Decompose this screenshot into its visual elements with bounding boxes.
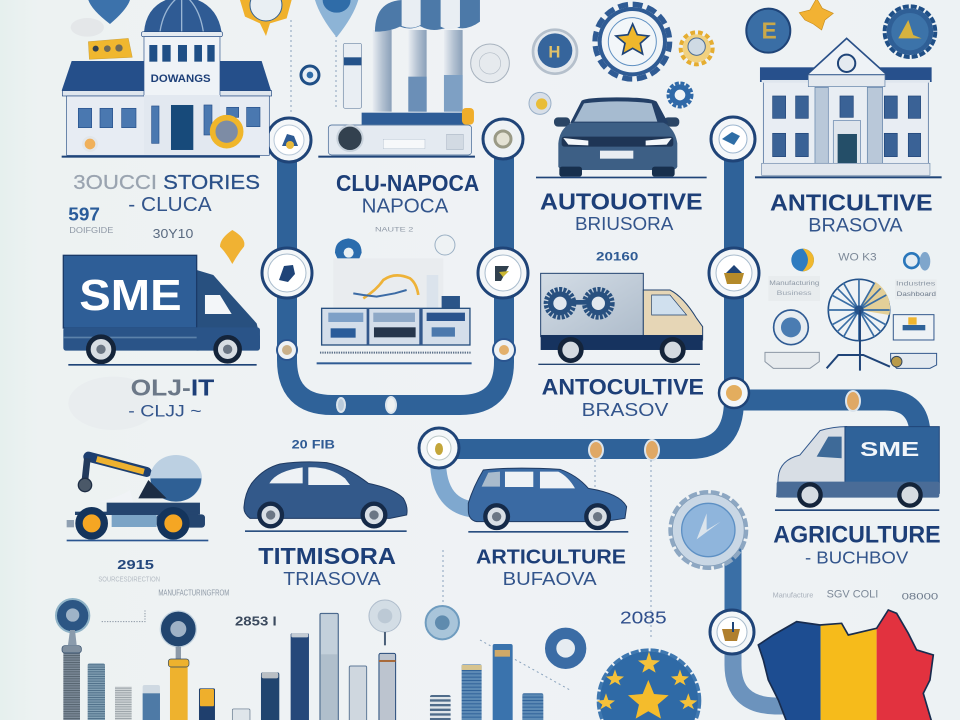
- faint stat labels: 08000: [902, 591, 938, 601]
- icon: yellow star badge: [799, 0, 833, 30]
- subtitle: Bufaova: BUFAOVA: [503, 568, 597, 589]
- car front: [536, 97, 707, 178]
- marker circle 3: [369, 600, 401, 645]
- pipe markers: [337, 391, 860, 460]
- title: Timisora: TITMISORA: [258, 543, 396, 569]
- icon: blue gear: [668, 83, 692, 107]
- timeline nodes: [262, 117, 860, 654]
- year label: 30Y10: [153, 227, 193, 241]
- building: [62, 0, 272, 158]
- panel: lower vehicles: [56, 455, 482, 720]
- icon: blue and yellow ball: [791, 249, 814, 271]
- node: top left: [267, 118, 311, 162]
- timeline pipe: light bend: [733, 640, 800, 706]
- title: Anticultive: ANTICULTIVE: [770, 190, 933, 216]
- icon: yellow gear: [240, 0, 292, 36]
- node: lower left: [419, 428, 459, 468]
- node: top centre: [483, 119, 523, 159]
- caption block right: Dashboard: [897, 291, 936, 298]
- icon: wind wheel: [827, 279, 890, 371]
- SME truck: [63, 255, 260, 366]
- panel: SME truck section: [63, 230, 472, 480]
- title: Antocultive: ANTOCULTIVE: [542, 374, 704, 399]
- year label: 2085: [620, 607, 667, 627]
- caption block left: Business: [777, 290, 812, 297]
- icon: crane pivot: [78, 478, 92, 492]
- panel: lower right: [538, 249, 939, 511]
- icon: flame pin: [220, 230, 244, 264]
- faint blob: [68, 377, 158, 430]
- timeline pipe: lower connector: [445, 150, 734, 449]
- subtitle: Napoca: NAPOCA: [362, 196, 449, 218]
- node: middle left: [262, 248, 312, 298]
- faint smudge: [71, 18, 104, 37]
- title: Articulture: ARTICULTURE: [476, 545, 626, 568]
- node: lower right: [710, 610, 754, 654]
- faint stat labels: Manufacture: [773, 590, 813, 599]
- subtitle: Brasova: BRASOVA: [808, 216, 903, 237]
- subtitle: Brasov: BRASOV: [582, 399, 669, 420]
- marker circle 4: [426, 606, 459, 639]
- title: Cluj-Napoca: CLU-NAPOCA: [336, 170, 479, 196]
- classical building: [755, 38, 942, 178]
- node: junction: [719, 378, 749, 408]
- year label: 2853 I: [235, 615, 277, 629]
- title: Agriculture: AGRICULTURE: [773, 522, 941, 549]
- subtitle: TRIASOVA: [283, 568, 381, 589]
- caption block right: [895, 279, 937, 299]
- panel: control desk: [317, 258, 472, 364]
- panel: town hall: [62, 0, 480, 241]
- node: small left: [277, 340, 297, 360]
- year label: 2915: [117, 558, 154, 572]
- dotted guide lines: [291, 20, 651, 690]
- icon: yellow gear: [681, 32, 713, 64]
- factory: [318, 0, 480, 158]
- timeline pipe: branch to van: [734, 400, 920, 436]
- SME truck: SME: [79, 271, 182, 320]
- subtitle: Clj: - CLJJ ~: [128, 402, 202, 421]
- stat: 597: 597: [68, 204, 100, 225]
- small caption: NAUTE 2: [375, 227, 414, 234]
- year label: 20160: [596, 250, 639, 264]
- icon: faint badge: [435, 235, 455, 255]
- chart bars right: [493, 644, 543, 720]
- icon: laptop: [891, 315, 937, 368]
- title: Automotive: AUTOUOTIVE: [540, 188, 703, 214]
- crane arm: [85, 457, 147, 480]
- icon: blue outline ball: [904, 252, 930, 271]
- crane vehicle: [67, 455, 208, 541]
- subtitle: Cluca: - CLUCA: [128, 194, 212, 216]
- faint caption line 2: MANUFACTURINGFROM: [158, 589, 229, 598]
- side car: [244, 462, 407, 532]
- marker circle 1: [56, 599, 89, 645]
- icon: EU stars badge: [597, 650, 700, 720]
- icon: light gear: [670, 492, 746, 568]
- dotted leader: [102, 609, 145, 622]
- stat caption: DOIFGIDE: [69, 226, 113, 235]
- timeline pipe: left loop: [287, 150, 504, 405]
- node: small centre: [493, 339, 515, 361]
- node: top right: [711, 117, 755, 161]
- year label: 20 FIB: [292, 437, 335, 451]
- icon: blue pin: [335, 238, 362, 272]
- faint stat labels: SGV COLI: [827, 588, 878, 600]
- faint label: WO K3: [838, 252, 877, 264]
- gear truck: [538, 273, 703, 365]
- caption block left: [768, 276, 820, 301]
- node: middle centre: [478, 248, 528, 298]
- icon: blue gear badge: [885, 6, 935, 57]
- icon: small ring: [301, 66, 319, 84]
- icon: ring: [551, 633, 581, 663]
- icon: faint ring: [471, 44, 509, 83]
- timeline pipe: to Romania map: [724, 540, 742, 640]
- icon: top pin: [88, 0, 130, 24]
- SME van: [775, 427, 939, 511]
- caption block left: Manufacturing: [769, 280, 820, 287]
- faint stat labels: [773, 588, 938, 601]
- caption block right: Industries: [896, 281, 936, 288]
- timeline pipe: light curve to car: [438, 460, 478, 510]
- map: Romania flag: [757, 609, 934, 720]
- panel: bottom right: [476, 492, 941, 720]
- node: middle right: [709, 248, 759, 298]
- title: Doucci Stories: 3OUCCI STORIES: [73, 171, 260, 194]
- icon: silver badge: H: [548, 42, 560, 61]
- faint caption line 1: SOURCESDIRECTION: [98, 575, 160, 584]
- icon: light pin: [315, 0, 358, 37]
- icon: small gold badge: [529, 92, 551, 114]
- subtitle: Buchbov: - BUCHBOV: [805, 547, 908, 567]
- SME van: SME: [860, 439, 919, 461]
- icon: globe screen: [765, 310, 819, 368]
- icon: blue coin: E: [762, 18, 777, 44]
- panel: automotive and agriculture top: [471, 0, 942, 237]
- bars: [62, 613, 482, 720]
- icon: yellow sign: [88, 38, 132, 59]
- bar chart: [56, 599, 482, 720]
- icon: blue coin: [746, 9, 790, 53]
- title: Olj-IT: OLJ-IT: [131, 375, 214, 401]
- subtitle: Briusora: BRIUSORA: [575, 213, 674, 234]
- icon: silver badge: [533, 30, 577, 74]
- hatchback car: [468, 468, 628, 533]
- icon: large star gear: [595, 4, 670, 79]
- building: DOWANGS: [151, 73, 211, 85]
- marker circle 2: [160, 611, 196, 660]
